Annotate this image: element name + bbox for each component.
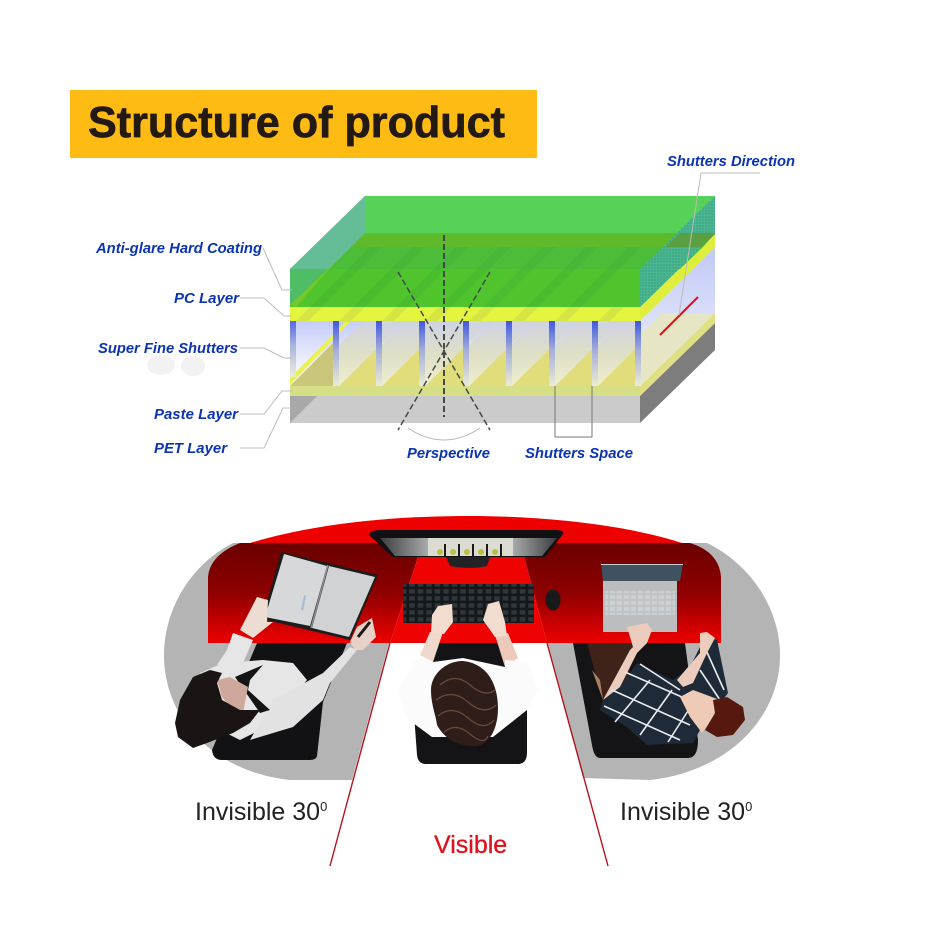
right hand	[483, 601, 507, 637]
title: Structure of product	[88, 99, 505, 147]
perspective arc	[408, 428, 480, 440]
hair curls	[436, 678, 496, 741]
shirt	[200, 660, 307, 740]
left arm	[420, 632, 443, 662]
label: PC layer: PC Layer	[174, 291, 240, 307]
raised arm	[677, 632, 715, 687]
desk	[208, 516, 721, 643]
arm	[603, 623, 652, 700]
leader lines	[240, 173, 760, 448]
invisible zone: left	[164, 543, 389, 780]
left chair	[212, 643, 347, 760]
hair	[705, 697, 745, 737]
left hand	[240, 597, 273, 638]
shirt	[398, 657, 538, 737]
face	[680, 690, 720, 733]
right chair	[573, 643, 698, 758]
torso skin	[587, 643, 633, 700]
laptop	[601, 564, 683, 632]
left sleeve	[217, 633, 253, 665]
centre woman	[398, 601, 538, 746]
super fine shutters	[290, 247, 715, 386]
label: invisible right: 0	[745, 799, 752, 814]
anti-glare hard coating	[290, 196, 715, 307]
perspective lines	[398, 235, 490, 430]
right arm	[495, 633, 518, 667]
label: shutters space: Shutters Space	[525, 446, 633, 462]
face	[217, 677, 248, 713]
left hand	[431, 604, 453, 634]
PC layer	[290, 234, 715, 321]
shutters direction red line	[660, 297, 698, 335]
label: anti-glare hard coating: Anti-glare Hard Coating	[95, 241, 262, 257]
label: paste layer: Paste Layer	[154, 407, 239, 423]
right sleeve	[250, 647, 357, 740]
left woman	[175, 597, 376, 748]
monitor	[369, 530, 563, 568]
office privacy scene	[164, 516, 780, 866]
invisible zone: right	[547, 543, 780, 780]
PET layer	[290, 323, 715, 423]
shutters space bracket	[555, 386, 592, 437]
visible cone lines	[330, 643, 608, 866]
label: perspective: Perspective	[407, 446, 490, 462]
label: PET layer: PET Layer	[154, 441, 228, 457]
label: visible: Visible	[434, 831, 507, 859]
hair	[431, 661, 498, 746]
plaid stripes	[604, 650, 724, 742]
hair	[175, 670, 260, 748]
mouse	[546, 590, 560, 610]
open book	[262, 552, 378, 640]
collar	[235, 665, 270, 713]
centre chair	[413, 643, 527, 764]
label: invisible left: Invisible 30	[195, 798, 320, 826]
label: super fine shutters: Super Fine Shutters	[98, 341, 238, 357]
title banner	[70, 90, 537, 158]
label: shutters direction: Shutters Direction	[667, 154, 795, 170]
man	[587, 623, 745, 745]
plaid shirt	[600, 637, 728, 745]
faint smudge	[147, 355, 205, 376]
label: invisible right: Invisible 30	[620, 798, 745, 826]
pen	[358, 622, 370, 637]
label: invisible left: 0	[320, 799, 327, 814]
right hand	[350, 618, 376, 650]
keyboard	[403, 584, 534, 623]
paste layer	[290, 313, 715, 396]
layered structure diagram	[290, 196, 715, 440]
